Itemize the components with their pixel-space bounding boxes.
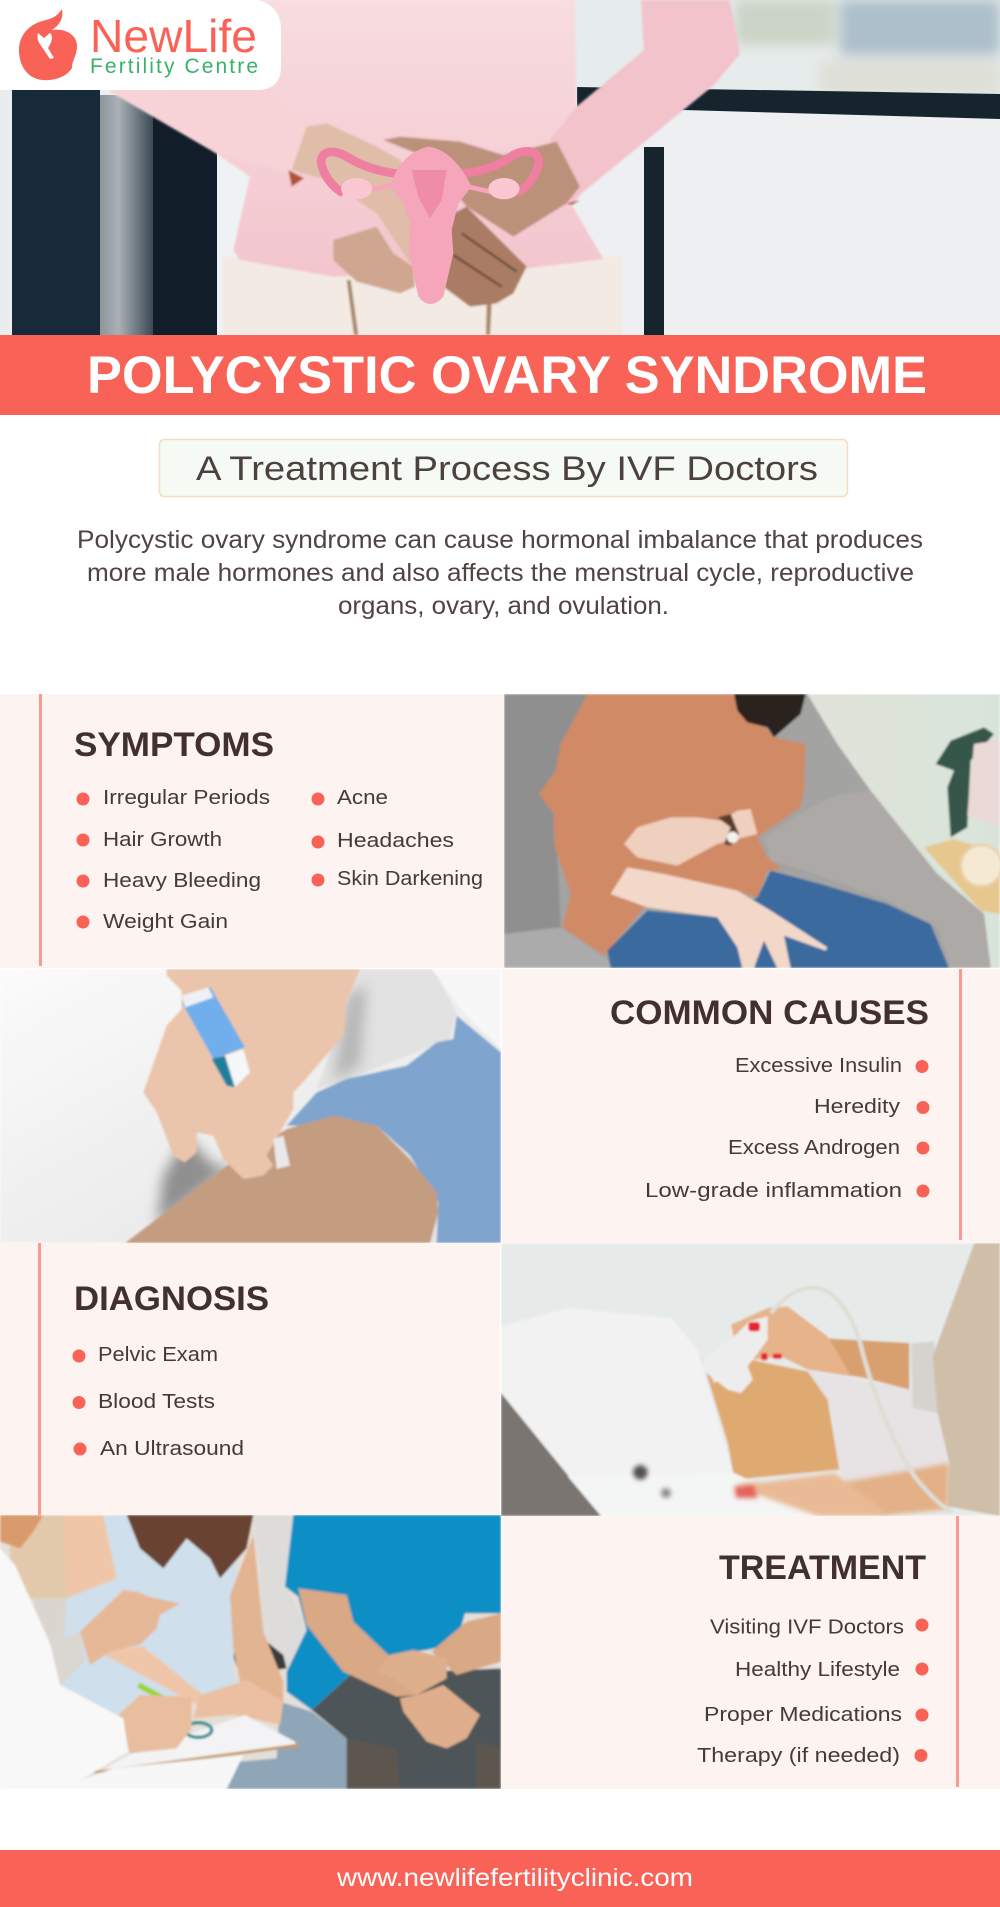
treatment list [697, 1616, 928, 1767]
diagnosis list: An Ultrasound [100, 1438, 244, 1460]
causes list: Heredity [814, 1096, 900, 1118]
causes list: Excess Androgen [728, 1137, 900, 1159]
treatment list: Proper Medications [704, 1704, 902, 1726]
logo tagline: Fertility Centre [90, 55, 258, 78]
photo: couple consulting doctor [0, 1515, 501, 1789]
diagnosis list: Blood Tests [98, 1391, 215, 1413]
intro paragraph: more male hormones and also affects the menstrual cycle, reproductive [87, 559, 914, 587]
panel: common causes [502, 969, 1000, 1243]
hero photo: woman holding abdomen with uterus illustration [0, 0, 1000, 335]
intro paragraph: Polycystic ovary syndrome can cause hormonal imbalance that produces [77, 526, 923, 554]
causes list: Low-grade inflammation [645, 1180, 902, 1202]
photo: woman on chair with stomach pain [504, 694, 1000, 968]
treatment list: Visiting IVF Doctors [710, 1616, 904, 1638]
icon: logo mother and baby [19, 9, 77, 80]
diagnosis list [72, 1344, 244, 1460]
subtitle: A Treatment Process By IVF Doctors [196, 450, 818, 488]
panel: symptoms [0, 694, 504, 968]
left sleeve and torso (drawn in reference crop coordinates) [110, 0, 740, 335]
logo wordmark: NewLife [90, 10, 257, 62]
heading: common causes: COMMON CAUSES [610, 994, 929, 1032]
intro paragraph [77, 526, 923, 620]
heading: diagnosis: DIAGNOSIS [74, 1280, 269, 1318]
causes list [645, 1055, 930, 1202]
causes list: Excessive Insulin [735, 1055, 902, 1077]
symptoms list: Headaches [337, 830, 454, 852]
symptoms list: Hair Growth [103, 829, 222, 851]
heading: treatment: TREATMENT [719, 1549, 926, 1587]
diagnosis list: Pelvic Exam [98, 1344, 218, 1366]
symptoms list [76, 787, 483, 933]
footer bar [0, 1850, 1000, 1907]
photo: abdominal ultrasound [501, 1243, 1000, 1516]
treatment list: Therapy (if needed) [697, 1745, 900, 1767]
photo: insulin pen injection [0, 969, 501, 1243]
title: POLYCYSTIC OVARY SYNDROME [87, 346, 927, 405]
hands [291, 122, 411, 263]
title banner [0, 335, 1000, 415]
symptoms list: Acne [337, 787, 388, 809]
footer url: www.newlifefertilityclinic.com [336, 1864, 693, 1892]
symptoms list: Skin Darkening [337, 868, 483, 890]
symptoms list: Weight Gain [103, 911, 228, 933]
panel: diagnosis [0, 1243, 500, 1515]
symptoms list: Irregular Periods [103, 787, 270, 809]
uterus illustration [321, 147, 539, 304]
subtitle box [160, 440, 848, 496]
logo card [0, 0, 281, 90]
heading: symptoms: SYMPTOMS [74, 726, 274, 764]
panel: treatment [501, 1516, 1000, 1789]
symptoms list: Heavy Bleeding [103, 870, 261, 892]
intro paragraph: organs, ovary, and ovulation. [338, 592, 669, 620]
treatment list: Healthy Lifestyle [735, 1659, 900, 1681]
